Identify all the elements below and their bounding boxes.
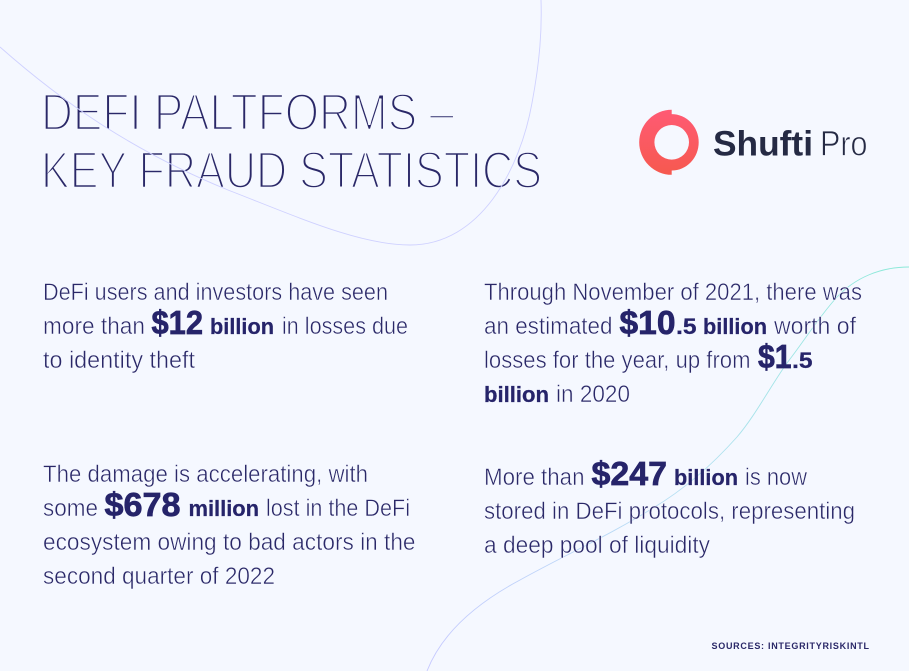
icon: logo ring xyxy=(639,110,699,175)
stat: $678 million: $678 xyxy=(104,487,180,524)
stat: $10.5 billion: an estimated xyxy=(484,313,612,340)
stat: $12 billion: billion xyxy=(210,314,274,339)
stat: $247 billion: a deep pool of liquidity xyxy=(484,532,710,559)
logo: Shufti Pro: Pro xyxy=(820,124,868,164)
stat: $10.5 billion xyxy=(484,279,862,408)
title: DEFI PALTFORMS – xyxy=(41,84,454,142)
stat: $247 billion: is now xyxy=(745,464,808,491)
stat: $12 billion: more than xyxy=(43,313,145,340)
stat: $10.5 billion: Through November of 2021, there was xyxy=(484,279,862,306)
stat: $678 million: million xyxy=(188,496,259,521)
stat: $12 billion: $12 xyxy=(152,305,203,342)
stat: $678 million: The damage is accelerating, with xyxy=(43,461,368,488)
logo: Shufti Pro: Shufti xyxy=(713,124,813,164)
stat: $10.5 billion: billion xyxy=(484,382,549,407)
stat: $12 billion xyxy=(43,279,408,374)
sources note: SOURCES: INTEGRITYRISKINTL xyxy=(712,641,870,651)
background curve: teal gradient xyxy=(427,267,909,671)
stat: $247 billion: More than xyxy=(484,464,584,491)
stat: $12 billion: DeFi users and investors have seen xyxy=(43,279,388,306)
stat: $10.5 billion: .5 xyxy=(676,314,696,339)
stat: $12 billion: to identity theft xyxy=(43,347,195,374)
stat: $12 billion: in losses due xyxy=(282,313,408,340)
stat: $10.5 billion: losses for the year, up from xyxy=(484,347,750,374)
title xyxy=(41,84,542,200)
stat: $10.5 billion: billion xyxy=(703,314,767,339)
title: KEY FRAUD STATISTICS xyxy=(41,142,542,200)
stat: $10.5 billion: in 2020 xyxy=(556,381,630,408)
stat: $247 billion xyxy=(484,456,855,559)
stat: $678 million: second quarter of 2022 xyxy=(43,563,275,590)
stat: $10.5 billion: worth of xyxy=(773,313,856,340)
stat: $247 billion: billion xyxy=(674,465,738,490)
background curve: lavender xyxy=(0,0,541,245)
stat: $678 million: some xyxy=(43,495,98,522)
stat: $678 million xyxy=(43,461,416,590)
stat: $678 million: ecosystem owing to bad actors in the xyxy=(43,529,416,556)
stat: $247 billion: stored in DeFi protocols, representing xyxy=(484,498,855,525)
logo: Shufti Pro xyxy=(639,110,868,175)
stat: $678 million: lost in the DeFi xyxy=(266,495,410,522)
stat: $247 billion: $247 xyxy=(592,456,667,493)
stat: $10.5 billion: $10 xyxy=(620,305,676,342)
stat: $10.5 billion: .5 xyxy=(792,348,812,373)
stat: $10.5 billion: $1 xyxy=(758,339,792,376)
